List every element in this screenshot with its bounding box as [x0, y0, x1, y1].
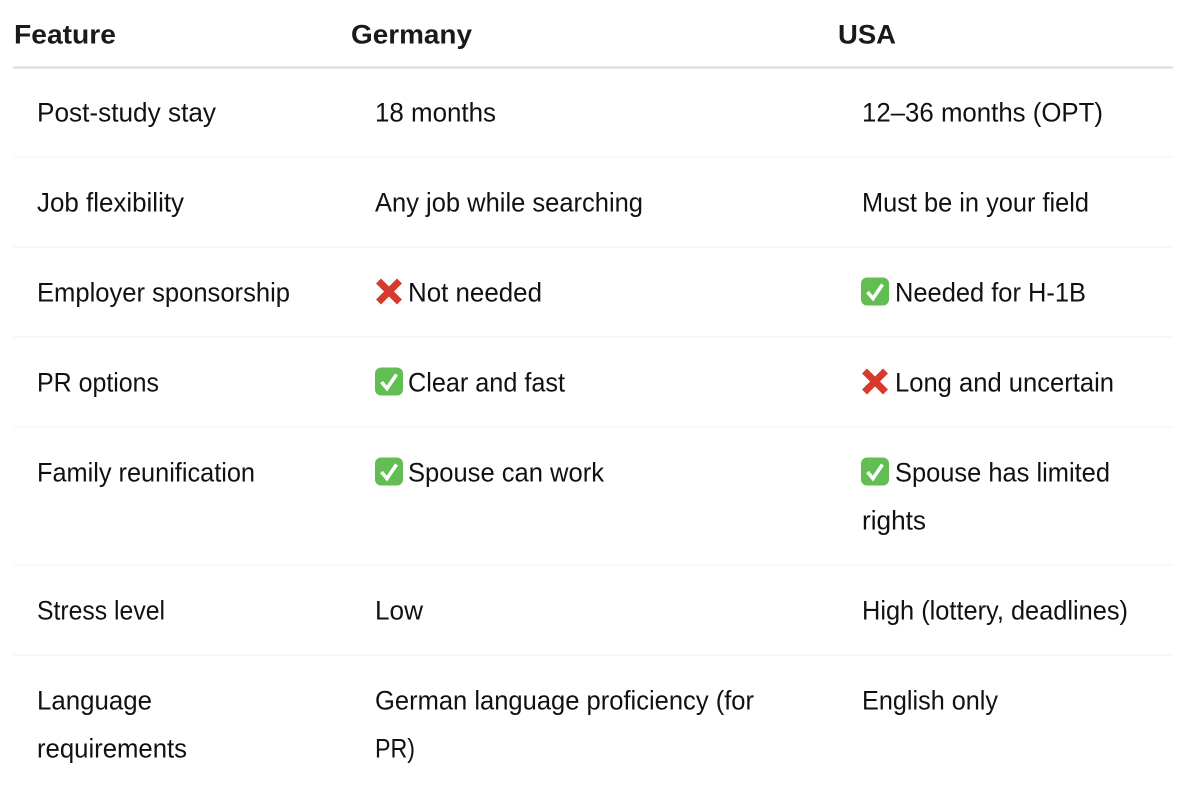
row: PR options: PR options [37, 368, 159, 398]
row: language requirements: Language [37, 686, 152, 716]
row: family reunification [37, 458, 1110, 536]
row: stress level: Low [375, 596, 423, 626]
row: PR options [37, 368, 1114, 398]
row: language requirements [37, 686, 998, 764]
row: family reunification: Family reunification [37, 458, 255, 488]
row: PR options: Long and uncertain [895, 368, 1114, 398]
row: employer sponsorship [37, 278, 1086, 308]
table header [13, 20, 1173, 68]
row: post-study stay: 18 months [375, 98, 496, 128]
row: language requirements: German language proficiency (for [375, 686, 754, 716]
table header: Germany [351, 20, 472, 50]
row: stress level: High (lottery, deadlines) [862, 596, 1128, 626]
row: PR options: Clear and fast [408, 368, 565, 398]
row: job flexibility [37, 188, 1089, 218]
row: language requirements: requirements [37, 734, 187, 764]
row: job flexibility: Must be in your field [862, 188, 1089, 218]
row: job flexibility: Any job while searching [375, 188, 643, 218]
table header: Feature [14, 20, 116, 50]
row: language requirements: English only [862, 686, 998, 716]
row: stress level: Stress level [37, 596, 165, 626]
row: post-study stay: 12–36 months (OPT) [862, 98, 1103, 128]
row: post-study stay: Post-study stay [37, 98, 216, 128]
row: language requirements: PR) [375, 734, 415, 764]
row: job flexibility: Job flexibility [37, 188, 184, 218]
table header: USA [838, 20, 896, 50]
row: employer sponsorship: Employer sponsorship [37, 278, 290, 308]
row: family reunification: Spouse has limited [895, 458, 1110, 488]
row: employer sponsorship: Needed for H-1B [895, 278, 1086, 308]
row: post-study stay [37, 98, 1103, 128]
row: stress level [37, 596, 1128, 626]
row: employer sponsorship: Not needed [408, 278, 542, 308]
row: family reunification: Spouse can work [408, 458, 604, 488]
row: family reunification: rights [862, 506, 926, 536]
